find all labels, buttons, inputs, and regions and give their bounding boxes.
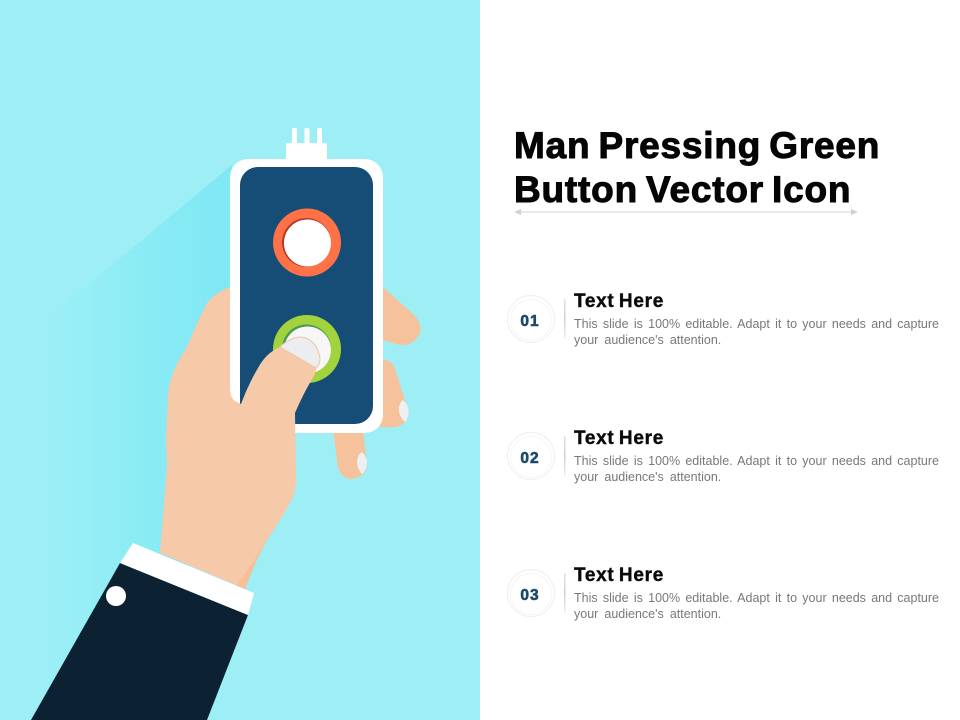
title: Man Pressing Green: [514, 125, 880, 166]
number badge 03: [507, 569, 566, 617]
text 03: [574, 591, 939, 621]
number badge 03: 03: [520, 587, 540, 604]
green button: [273, 315, 341, 383]
title underline arrow: [514, 209, 858, 215]
item 02: [507, 432, 566, 480]
panel: illustration background: [0, 0, 480, 720]
text 01: This slide is 100% editable. Adapt it to your needs and capture: [574, 317, 939, 331]
icon: sleeve with cuff and button: [31, 543, 254, 720]
fingers behind phone: [333, 280, 421, 479]
phone device: [230, 128, 383, 433]
text 03: This slide is 100% editable. Adapt it to your needs and capture: [574, 591, 939, 605]
heading 01: Text Here: [574, 291, 664, 312]
text 03: your audience's attention.: [574, 607, 721, 621]
text 02: [574, 454, 939, 484]
title: [514, 125, 880, 210]
number badge 02: 02: [520, 450, 540, 467]
item 03: [507, 569, 566, 617]
text 02: This slide is 100% editable. Adapt it to your needs and capture: [574, 454, 939, 468]
thumb nail: [280, 337, 320, 368]
hand and thumb: [160, 287, 317, 589]
heading 03: Text Here: [574, 565, 664, 586]
text 02: your audience's attention.: [574, 470, 721, 484]
number badge 01: 01: [520, 313, 540, 330]
icon: hand pressing green button: [160, 128, 421, 589]
red button: [273, 208, 341, 276]
heading 02: Text Here: [574, 428, 664, 449]
number badge 02: [507, 432, 566, 480]
item 01: [507, 295, 566, 343]
text 01: [574, 317, 939, 347]
text 01: your audience's attention.: [574, 333, 721, 347]
title: Button Vector Icon: [514, 169, 851, 210]
number badge 01: [507, 295, 566, 343]
